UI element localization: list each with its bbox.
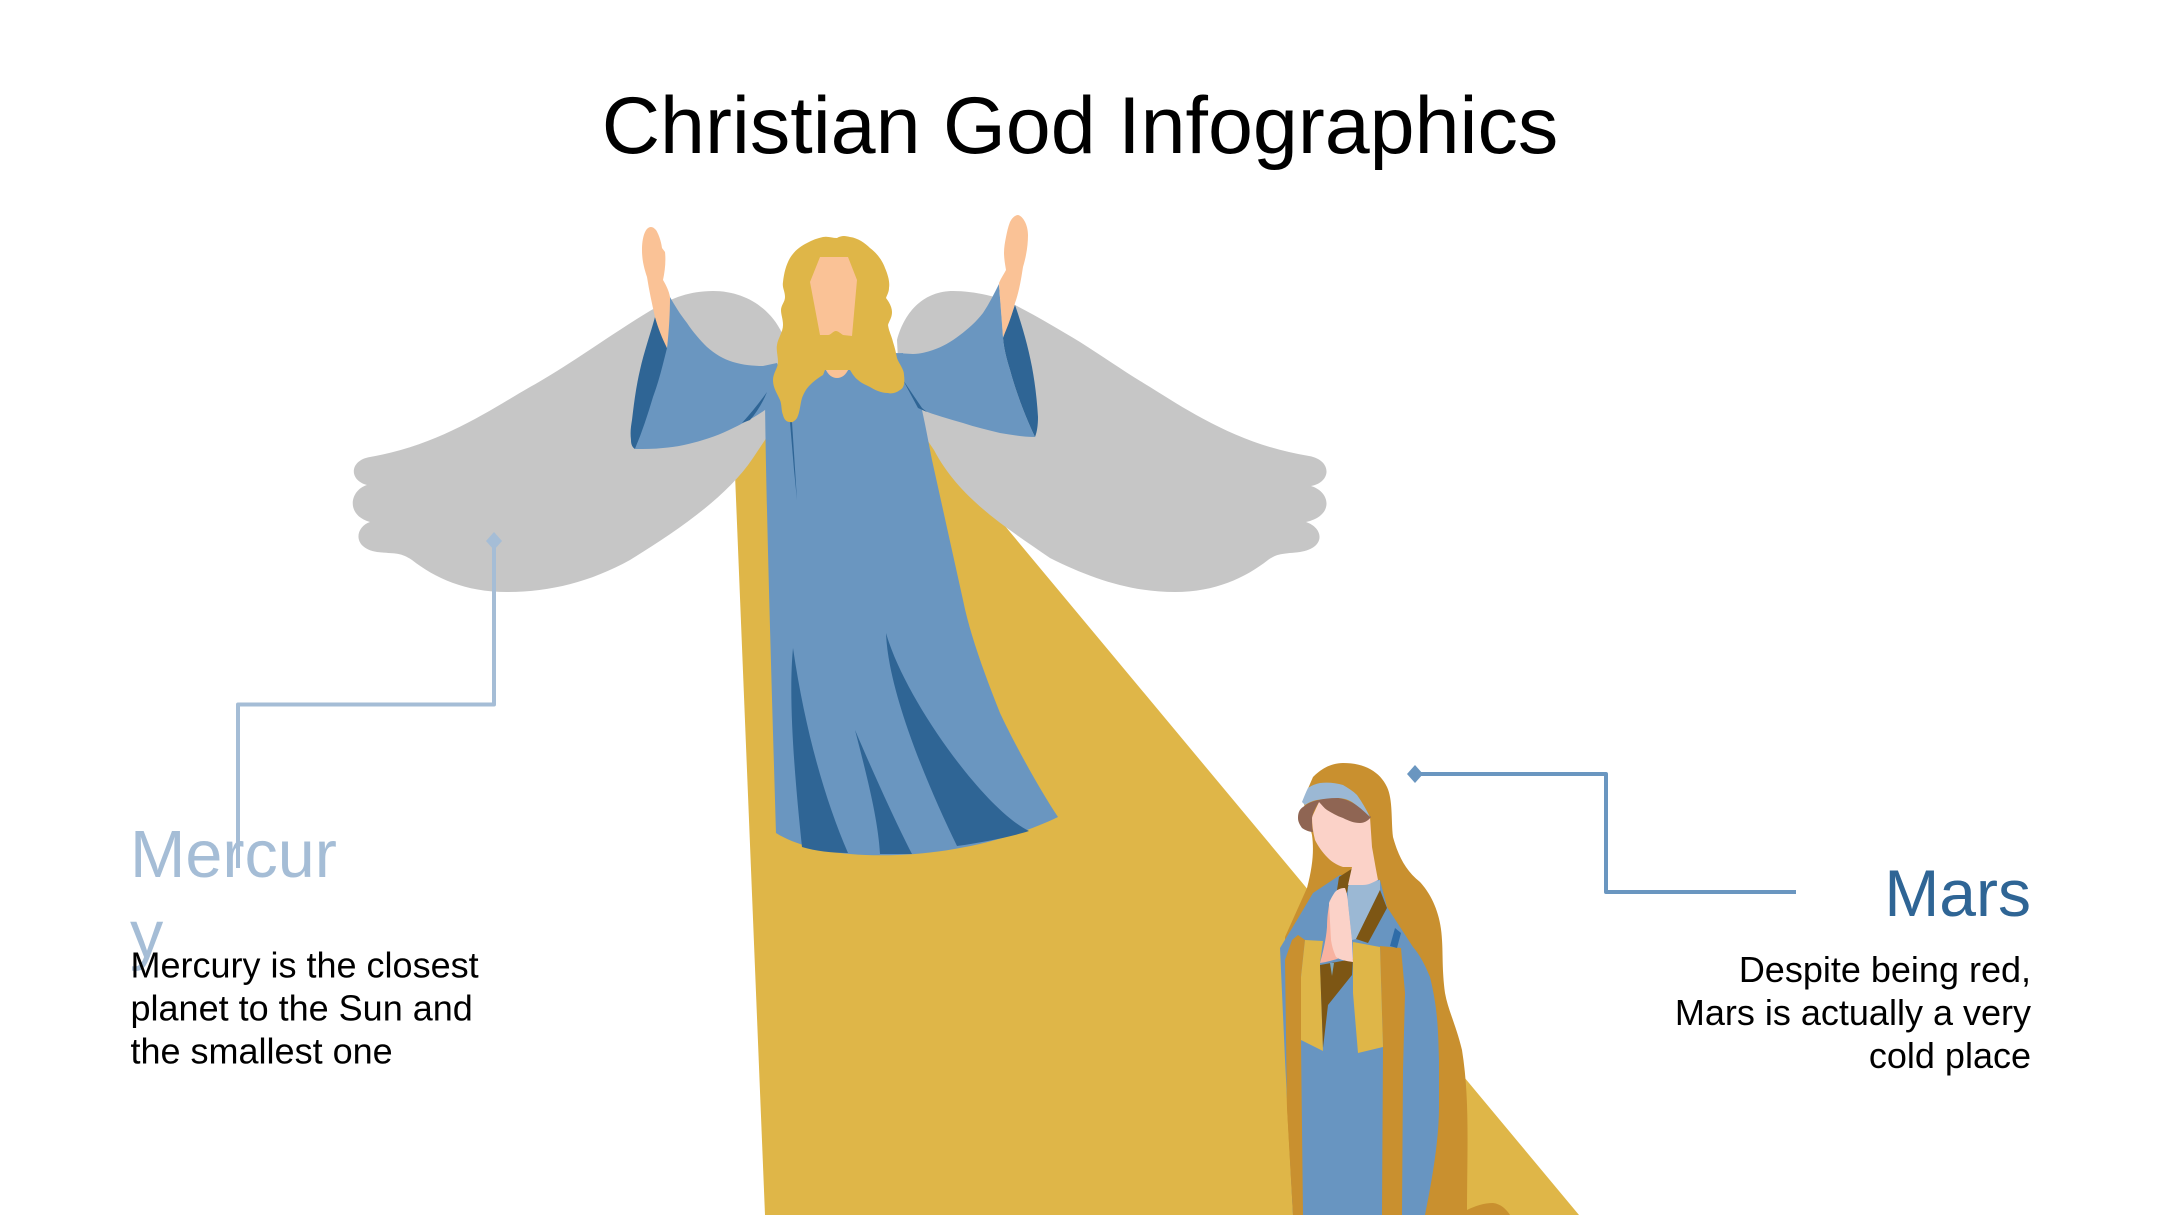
text: Mars description: cold place bbox=[1869, 1035, 2031, 1076]
foot bbox=[1465, 1203, 1510, 1215]
text: Mars description: Despite being red, bbox=[1739, 949, 2031, 990]
left sleeve bbox=[635, 297, 785, 449]
sash upper left bbox=[1337, 868, 1353, 893]
heading: Mercury: y bbox=[130, 898, 164, 972]
robe bbox=[765, 353, 1058, 855]
text: Mercury description: the smallest one bbox=[130, 1030, 393, 1072]
face and neck bbox=[1312, 802, 1378, 885]
beam of light bbox=[732, 400, 1579, 1215]
callout line: Mars bbox=[1407, 765, 1796, 892]
heading: Mars: Mars bbox=[1884, 856, 2031, 930]
right sleeve band bbox=[1380, 946, 1405, 1215]
face bbox=[810, 257, 857, 336]
hand shadow bbox=[1320, 900, 1340, 963]
hair and beard bbox=[773, 236, 904, 422]
neck bbox=[825, 360, 849, 378]
dress bbox=[1280, 875, 1439, 1215]
hair bbox=[1298, 798, 1371, 832]
right sleeve inner bbox=[1003, 305, 1038, 437]
left sleeve inner bbox=[631, 317, 667, 449]
left hand and arm bbox=[642, 227, 670, 348]
finger accent bbox=[1330, 963, 1334, 976]
undershirt bbox=[1348, 880, 1380, 940]
text: Mars description: Mars is actually a very bbox=[1675, 992, 2031, 1033]
sash right bbox=[1356, 890, 1387, 943]
sash lower bbox=[1320, 959, 1353, 1048]
dark patch bbox=[1390, 928, 1401, 948]
right cuff bbox=[1353, 942, 1383, 1053]
illustration: angel bbox=[353, 215, 1327, 855]
left sleeve band bbox=[1285, 935, 1305, 1215]
right hand and arm bbox=[999, 215, 1028, 337]
robe folds bbox=[742, 380, 1029, 854]
left wing bbox=[353, 291, 785, 592]
callout line: Mercury bbox=[238, 532, 502, 868]
right sleeve bbox=[895, 284, 1035, 437]
cloak bbox=[1285, 763, 1468, 1215]
text: Mercury description: Mercury is the closest bbox=[130, 944, 479, 986]
headband bbox=[1302, 783, 1370, 817]
title: Christian God Infographics bbox=[602, 81, 1558, 171]
illustration: praying woman bbox=[1280, 763, 1510, 1215]
left cuff bbox=[1301, 940, 1323, 1051]
hands bbox=[1329, 888, 1353, 962]
right wing bbox=[897, 291, 1327, 592]
heading: Mercury: Mercur bbox=[130, 818, 337, 892]
text: Mercury description: planet to the Sun and bbox=[130, 988, 473, 1028]
